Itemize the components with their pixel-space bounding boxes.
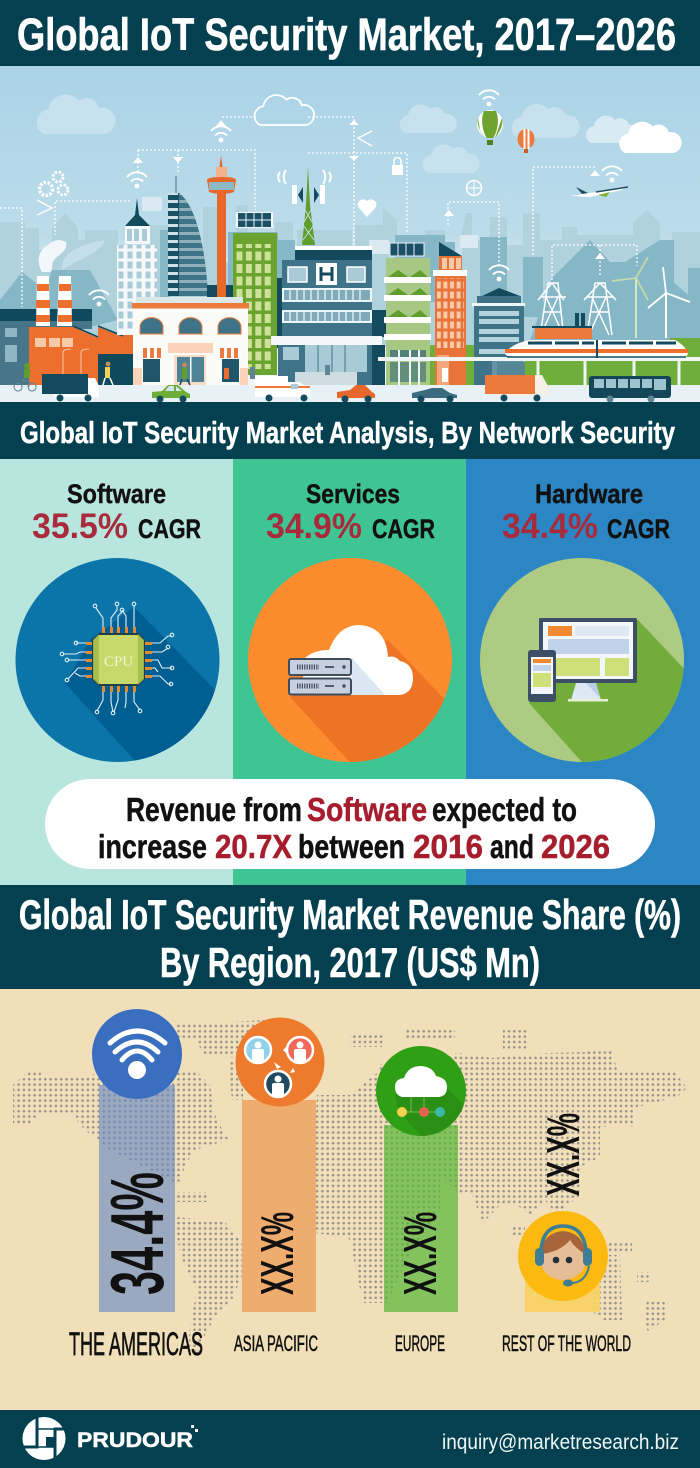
contact email: inquiry@marketresearch.biz: [442, 1431, 679, 1454]
callout: software revenue: Revenue from: [126, 791, 302, 828]
label: ASIA PACIFIC: [234, 1331, 318, 1356]
heading: By Region, 2017 (US$ Mn): [160, 939, 540, 986]
green building: [233, 212, 283, 375]
curved tower: [168, 176, 233, 297]
panel: region background: [0, 989, 700, 1410]
small icons: gears, share, lock, heart, globe: [37, 120, 605, 259]
section band: network security: [0, 402, 700, 459]
footer: [0, 1410, 700, 1468]
section band: revenue share: [0, 885, 700, 989]
column: the americas: [69, 1009, 203, 1362]
icon: cloud server: [248, 558, 452, 770]
orange building: [430, 242, 475, 385]
icon: cloud network: [376, 1046, 470, 1140]
hospital with antenna: [271, 167, 386, 385]
stat: software CAGR: CAGR: [138, 514, 201, 544]
balloons and plane: [477, 110, 628, 197]
street: [0, 385, 700, 402]
stat: hardware CAGR: [502, 507, 670, 546]
stat: hardware CAGR: 34.4%: [502, 507, 598, 546]
label: services: Services: [306, 479, 400, 509]
stat: software CAGR: [32, 507, 201, 546]
label: EUROPE: [395, 1331, 445, 1356]
clouds: [37, 95, 682, 173]
logo mark: [21, 1416, 67, 1461]
observation tower: [207, 155, 236, 297]
callout: software revenue: increase: [98, 828, 207, 865]
bar: [242, 1100, 316, 1312]
icon: support headset: [518, 1211, 608, 1301]
logo wordmark: PRUDOUR: [77, 1429, 193, 1452]
stat: services CAGR: CAGR: [372, 514, 435, 544]
callout: software revenue: between: [298, 828, 405, 865]
smoke: [39, 240, 66, 272]
column: asia pacific: [234, 1018, 324, 1356]
title band: [0, 0, 700, 66]
icon: CPU: CPU: [104, 654, 133, 670]
callout: software revenue: [45, 779, 655, 869]
eco building: [384, 243, 431, 385]
panel: services: [233, 459, 466, 885]
label: THE AMERICAS: [69, 1326, 203, 1362]
network lines: [0, 117, 637, 307]
midground skyline: [0, 230, 700, 350]
elevated train: [378, 313, 700, 385]
column: europe: [376, 1046, 470, 1356]
stat: services CAGR: 34.9%: [266, 507, 362, 546]
value: 34.4%: [95, 1172, 179, 1295]
stat: software CAGR: 35.5%: [32, 507, 128, 546]
callout: software revenue: expected to: [432, 791, 577, 828]
panel: hardware: [466, 459, 700, 885]
value: XX.X%: [394, 1212, 446, 1295]
callout: software revenue: 2026: [541, 828, 610, 865]
icon: people: [236, 1018, 324, 1106]
wifi signals: [87, 90, 622, 376]
icon: CPU: [16, 558, 225, 770]
illustration: smart city skyline: [0, 66, 700, 404]
heading: [19, 891, 681, 986]
panel: software: [0, 459, 233, 885]
callout: software revenue: and: [490, 828, 534, 865]
stat: hardware CAGR: CAGR: [607, 514, 670, 544]
stat: services CAGR: [266, 507, 435, 546]
callout: software revenue: Software: [307, 791, 427, 828]
shop: [132, 297, 249, 385]
world dot map: [13, 1020, 687, 1353]
label: software: Software: [67, 479, 166, 509]
pylons and turbines: [538, 257, 690, 338]
icon: wifi: [92, 1009, 182, 1099]
buildings left: factory: [0, 276, 133, 385]
callout: software revenue: 2016: [413, 828, 483, 865]
bar: [99, 1085, 175, 1312]
bar: [384, 1125, 458, 1312]
column: rest of the world: [502, 1113, 631, 1356]
slate office: [472, 288, 525, 385]
callout: software revenue: 20.7X: [215, 828, 292, 865]
value: XX.X%: [251, 1212, 303, 1295]
label: hardware: Hardware: [535, 479, 643, 509]
white tower: [117, 198, 157, 335]
value: XX.X%: [537, 1113, 589, 1196]
icon: monitor and phone: [480, 558, 690, 770]
bar: [525, 1280, 600, 1312]
background skyline: [0, 205, 700, 347]
vehicles and people: [14, 362, 671, 402]
